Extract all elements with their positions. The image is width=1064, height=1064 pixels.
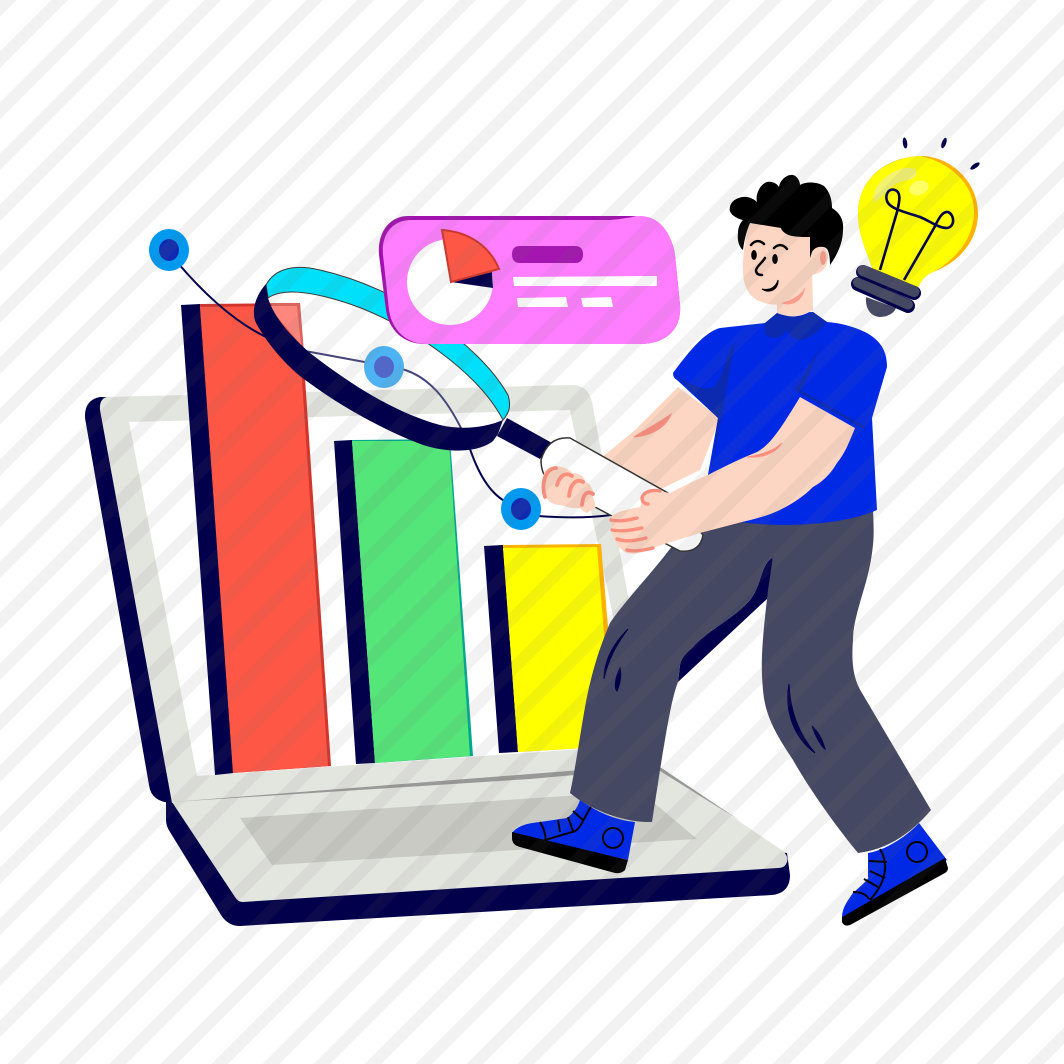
neck bbox=[777, 265, 813, 316]
front arm and hand bbox=[610, 397, 855, 554]
data point dot 3 bbox=[501, 488, 541, 530]
person bbox=[512, 175, 948, 926]
data point dot 2 bbox=[364, 346, 404, 388]
connector line: lens to third dot bbox=[470, 449, 611, 517]
back arm crease bbox=[634, 414, 671, 437]
fingers bbox=[611, 490, 660, 551]
magnifier inner rim bbox=[266, 267, 510, 420]
eyebrows, eyes, nose, mouth bbox=[751, 241, 787, 249]
bulb glass rim bbox=[858, 156, 978, 290]
shirt bbox=[673, 312, 887, 525]
data point dot 1 bbox=[149, 229, 189, 271]
magnifier front rim bbox=[254, 284, 503, 451]
connector line: through lens bbox=[305, 351, 462, 430]
trouser wrinkle lines bbox=[604, 629, 825, 753]
red bar bbox=[181, 300, 331, 775]
ear inner bbox=[820, 251, 826, 265]
jaw shadow bbox=[781, 287, 805, 305]
right shoe bbox=[842, 823, 948, 926]
laptop screen display bbox=[129, 410, 640, 776]
light bulb bbox=[858, 137, 981, 317]
card heading pill bbox=[512, 246, 583, 263]
laptop screen back edge bbox=[85, 397, 200, 803]
collar bbox=[765, 312, 827, 340]
filament bbox=[880, 190, 953, 280]
magnifying glass bbox=[254, 267, 552, 459]
bulb glass bbox=[858, 156, 974, 290]
shirt sleeve shading bbox=[673, 342, 866, 428]
bar chart bbox=[181, 300, 618, 775]
face bbox=[743, 215, 828, 305]
pie chart bbox=[407, 230, 499, 325]
bulb screw base bbox=[866, 297, 896, 317]
hair bbox=[730, 175, 843, 265]
laptop hinge line bbox=[172, 767, 742, 822]
bubble border bbox=[379, 216, 680, 344]
laptop trackpad area bbox=[240, 791, 697, 865]
light sparks bbox=[902, 137, 908, 149]
magnifier handle shaft bbox=[497, 418, 552, 459]
bulb highlights bbox=[873, 168, 917, 203]
laptop keyboard deck bbox=[172, 768, 787, 902]
speech bubble chart card bbox=[379, 216, 680, 344]
back hand bbox=[542, 467, 596, 513]
left shoe bbox=[512, 800, 635, 873]
back arm bbox=[600, 387, 720, 492]
connector line: first dot to lens bbox=[177, 262, 266, 337]
magnifier handle grip bbox=[541, 438, 703, 551]
laptop bbox=[85, 385, 790, 926]
laptop base shadow edge bbox=[166, 800, 790, 926]
bubble fill bbox=[383, 216, 680, 344]
card text lines bbox=[513, 276, 657, 307]
upper screw ring bbox=[863, 272, 914, 293]
yellow bar bbox=[484, 544, 618, 753]
arm crease bbox=[747, 443, 782, 457]
laptop screen frame bbox=[100, 385, 660, 803]
green bar bbox=[334, 439, 473, 764]
back leg shade bbox=[678, 557, 773, 682]
lower screw ring bbox=[858, 284, 908, 306]
trousers bbox=[570, 505, 931, 853]
head bbox=[730, 175, 843, 305]
